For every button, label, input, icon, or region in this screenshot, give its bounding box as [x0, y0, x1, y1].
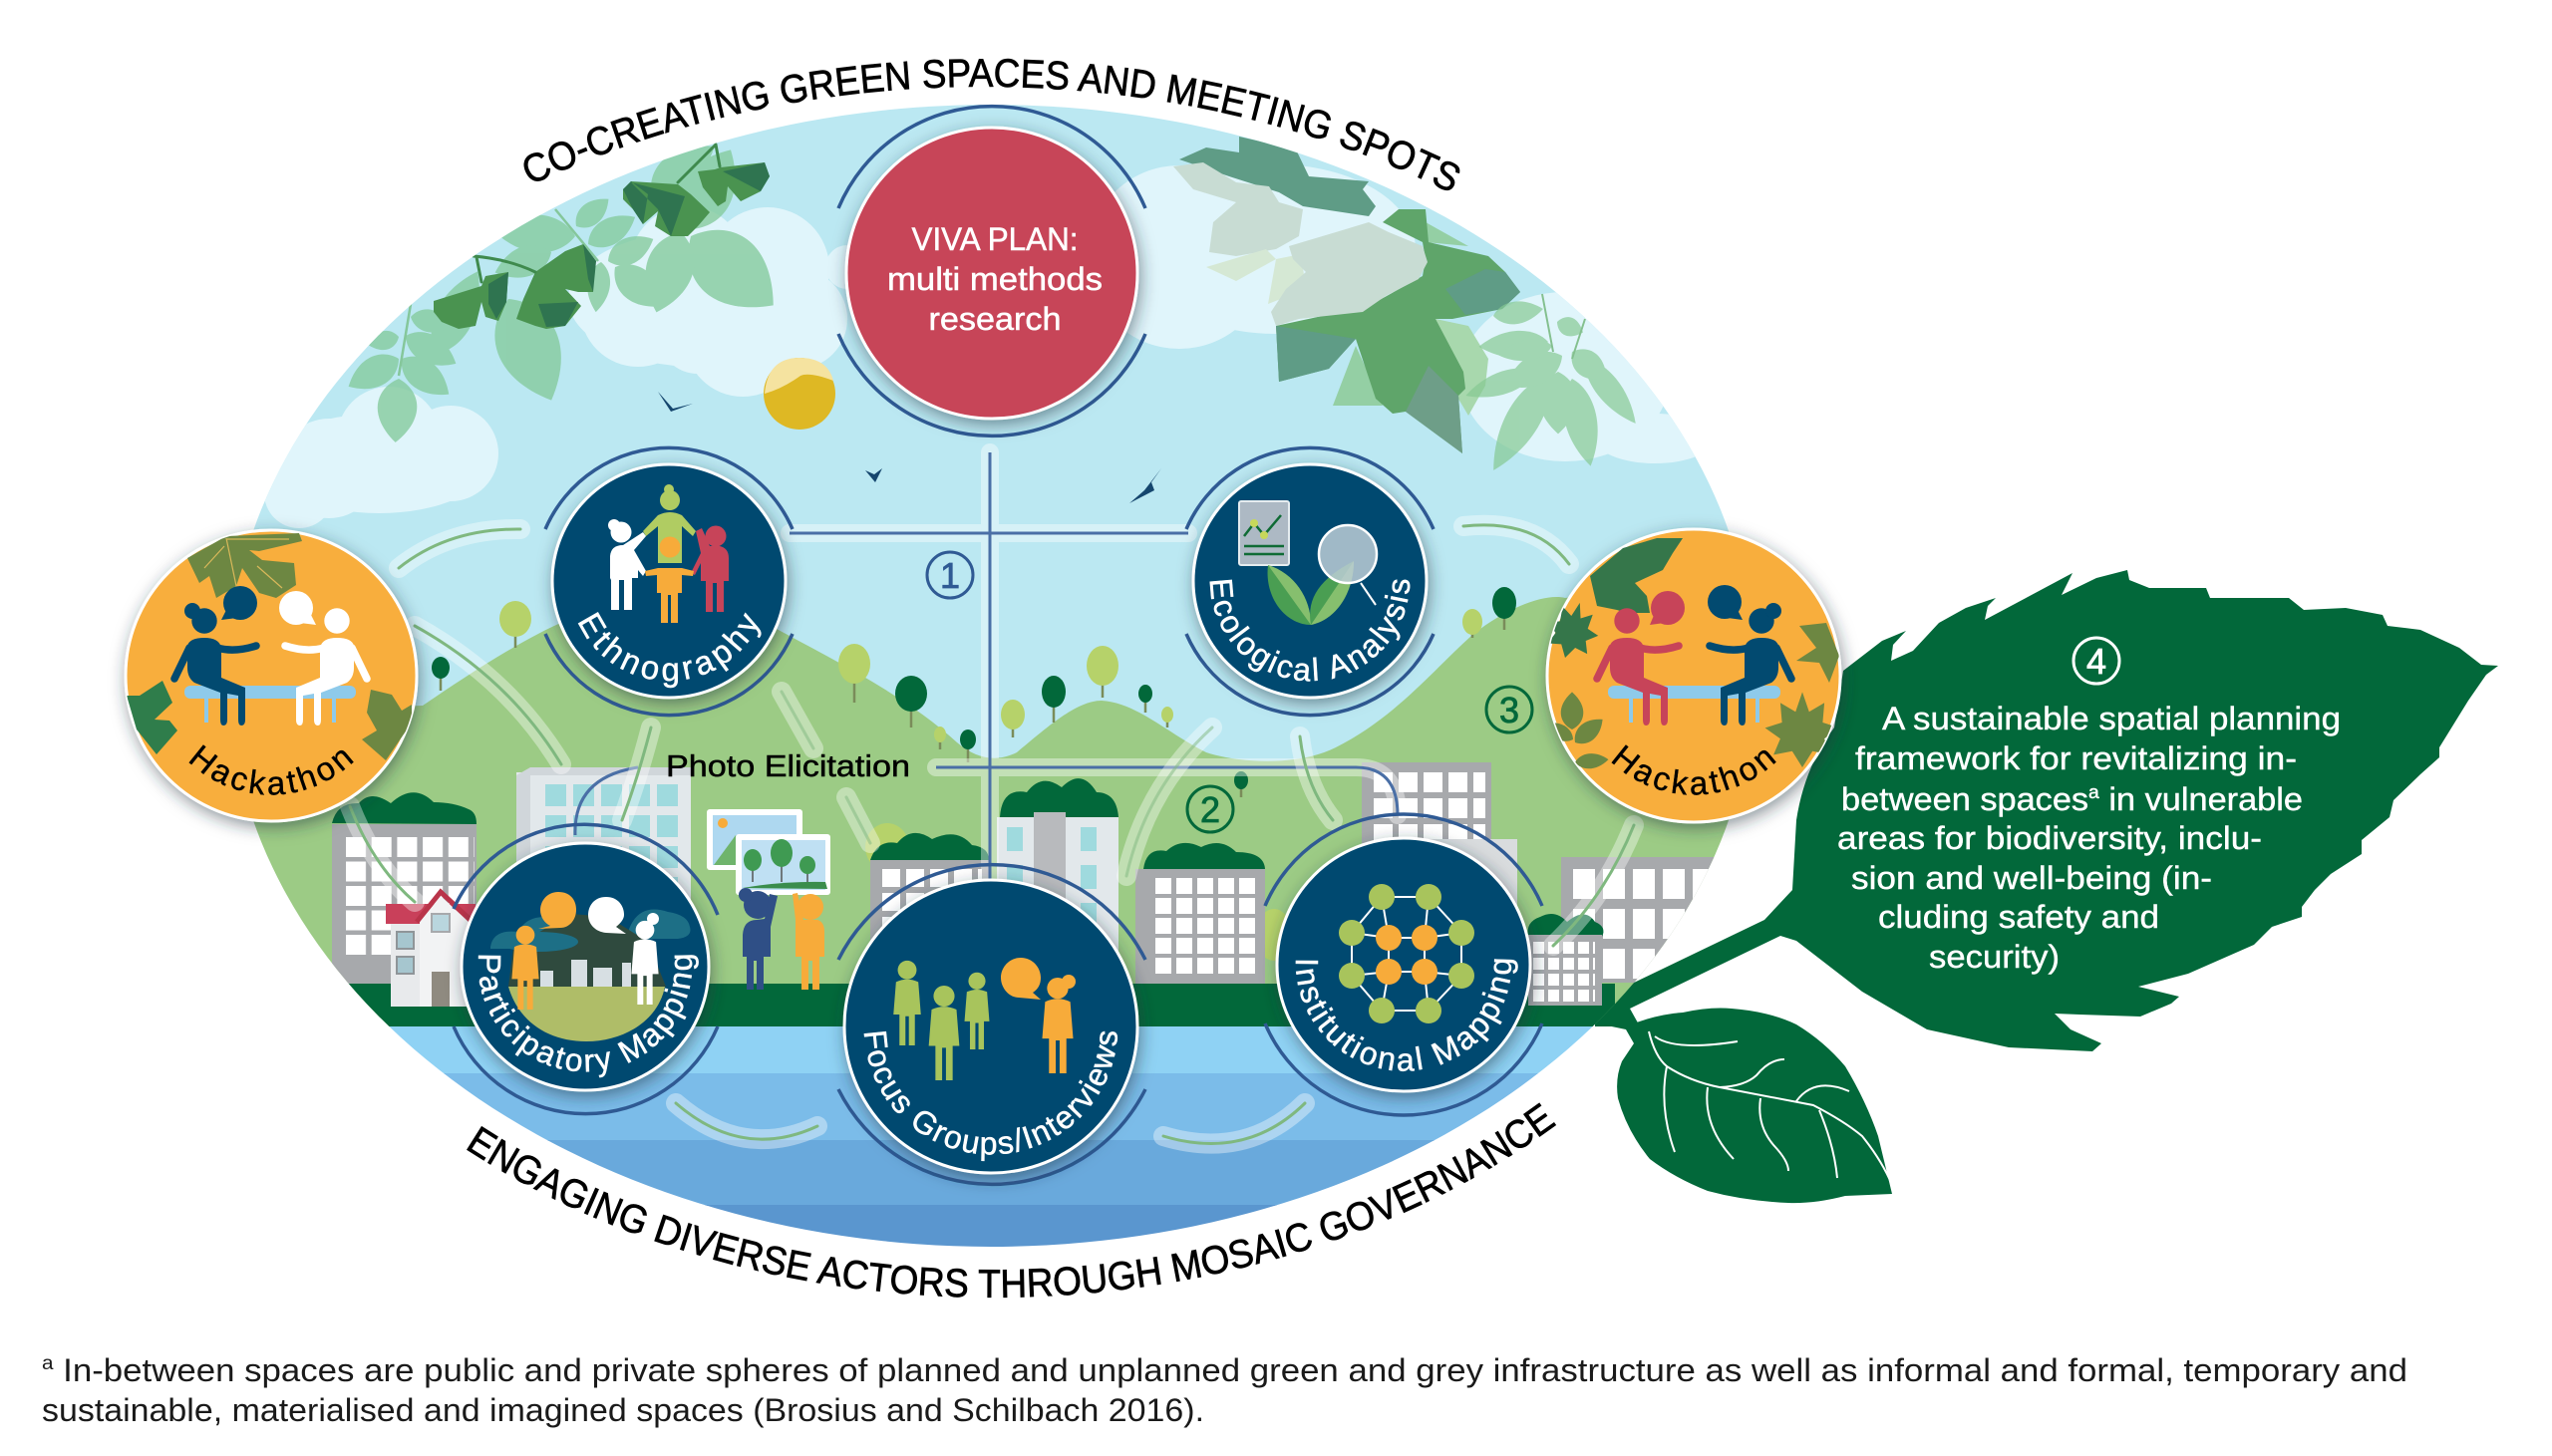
node: VIVA PLAN: research [929, 301, 1061, 337]
icon: red person and bubble [1597, 591, 1685, 726]
footnote: sustainable, materialised and imagined spaces (Brosius and Schilbach 2016). [42, 1392, 1204, 1428]
building 8 [1527, 914, 1603, 937]
icon: focus group [893, 958, 1076, 1080]
leaves top left [341, 133, 796, 443]
node: Hackathon left: Hackathon [189, 744, 354, 795]
step number 4 [2074, 638, 2119, 684]
step number 3 [1486, 687, 1532, 732]
landscape oval [199, 90, 1794, 1255]
bench [1608, 686, 1780, 723]
node: Ecological Analysis: Ecological Analysis [1209, 579, 1410, 682]
step number 2: 2 [1200, 789, 1220, 830]
icon: blue person and bubble [1708, 585, 1791, 726]
leaf text: outcome: A sustainable spatial planning [1882, 701, 2341, 736]
bench [184, 686, 356, 723]
hackathon leaves right [1539, 538, 1839, 769]
node: Focus Groups/Interviews [833, 863, 1152, 1190]
building 1 [332, 792, 477, 824]
node: Institutional Mapping: Institutional Mapping [1296, 959, 1518, 1072]
label: Photo Elicitation: Photo Elicitation [666, 748, 910, 783]
leaf text: outcome: areas for biodiversity, inclu- [1837, 820, 2262, 856]
node: Participatory Mapping: Participatory Mapping [478, 955, 699, 1078]
hills [199, 594, 1794, 1026]
icon: person and bubble [174, 586, 257, 726]
node: Hackathon right: Hackathon [1611, 744, 1776, 795]
leaves top right [1173, 137, 1645, 478]
trees [432, 587, 1516, 961]
house [386, 892, 476, 1007]
leaf text: outcome: a [2088, 782, 2100, 802]
hackathon leaves left [127, 533, 412, 760]
step number 4: 4 [2086, 641, 2106, 682]
connector lines [575, 452, 1398, 880]
icon: family [608, 484, 729, 623]
step number 2 [1187, 786, 1233, 832]
leaf text: outcome: between spaces [1841, 781, 2072, 817]
footnote: In-between spaces are public and private spheres of planned and unplanned green and grey infrastructure as well as informal and formal, temporary and [54, 1352, 2407, 1388]
node: Institutional Mapping [1263, 812, 1544, 1117]
leaf text: outcome: framework for revitalizing in- [1855, 740, 2297, 776]
step number 3: 3 [1499, 690, 1519, 730]
birds [658, 392, 1161, 503]
small leaf [1602, 1009, 1892, 1203]
icon: people viewing city [490, 892, 690, 1041]
buildings [199, 762, 1731, 1026]
big leaf with stem [1595, 570, 2498, 1051]
icon: second person and bubble [279, 591, 367, 726]
leaf text: outcome: security) [1929, 939, 2060, 975]
step number 1: 1 [940, 555, 960, 596]
node: Ecological Analysis [1182, 446, 1441, 718]
building 5 [1143, 843, 1265, 869]
leaf text: outcome [1837, 701, 2341, 975]
node: VIVA PLAN: multi methods [887, 261, 1103, 297]
node: Ethnography: Ethnography [578, 612, 762, 688]
step number 1 [927, 552, 973, 598]
node: VIVA PLAN [838, 107, 1145, 436]
leaf text: outcome: cluding safety and [1878, 899, 2159, 935]
title: bottom arc: ENGAGING DIVERSE ACTORS THROUGH MOSAIC GOVERNANCE [467, 1102, 1557, 1298]
leaf text: outcome: sion and well-being (in- [1851, 860, 2212, 896]
ground band [349, 984, 1615, 1026]
footnote: a [42, 1353, 54, 1374]
leaf text: outcome: in vulnerable [2099, 781, 2303, 817]
building 6 [1362, 762, 1491, 843]
sun [764, 358, 835, 430]
title: top arc: CO-CREATING GREEN SPACES AND MEETING SPOTS [523, 58, 1459, 191]
node: Hackathon left [115, 522, 432, 839]
footnote [42, 1352, 2407, 1428]
node: Focus Groups/Interviews: Focus Groups/Interviews [863, 1030, 1118, 1162]
node: Participatory Mapping [451, 823, 723, 1116]
clouds [264, 164, 1715, 528]
node: Hackathon right [1537, 521, 1854, 839]
node: Ethnography [541, 446, 800, 718]
icon: report and magnifier [1239, 501, 1377, 625]
building 4 [1000, 778, 1118, 817]
leaf veins [1649, 1031, 1892, 1185]
sky [253, 105, 1729, 761]
water bands [389, 1026, 1593, 1247]
icon: photo elicitation people and photos [707, 809, 830, 990]
icon: network [1339, 884, 1474, 1023]
building 3 [870, 833, 989, 860]
building 2 [516, 772, 691, 900]
node: VIVA PLAN: VIVA PLAN: [911, 221, 1079, 257]
building 7 [1561, 857, 1731, 983]
swoosh arcs [350, 525, 1634, 1144]
